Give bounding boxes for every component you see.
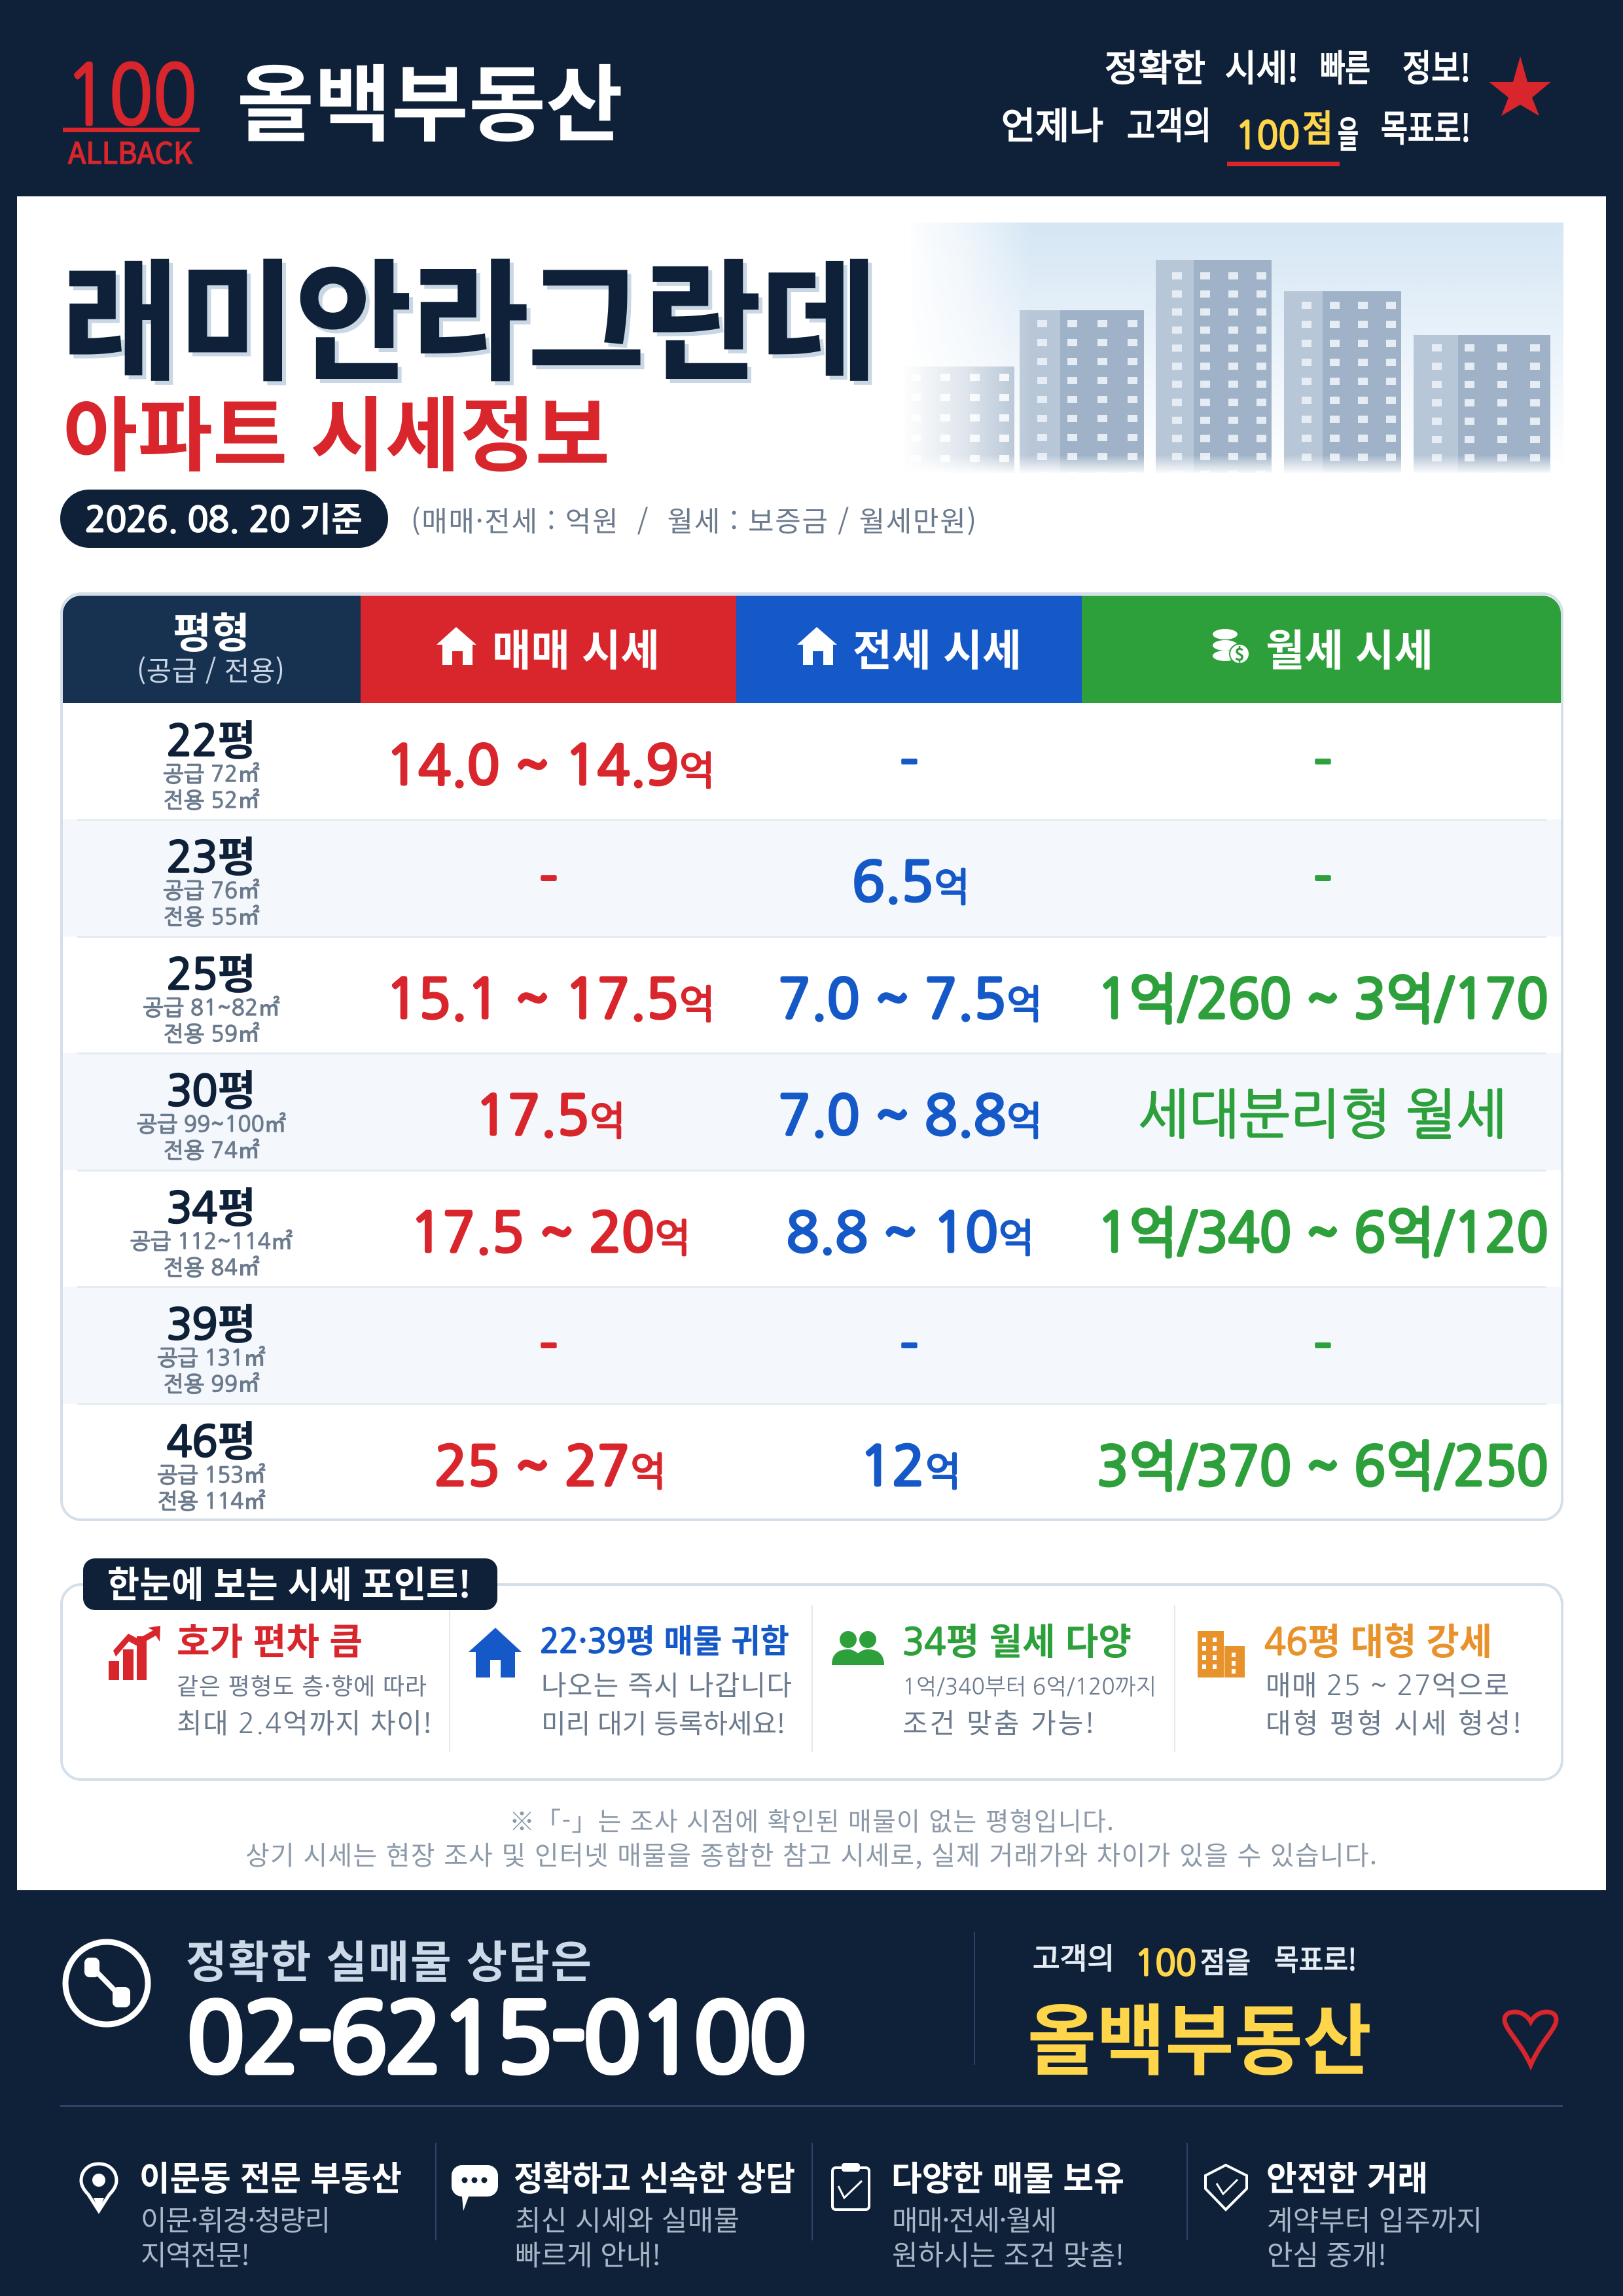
row: 34평: 1억/340 ~ 6억/120	[1097, 1206, 1548, 1259]
row: 22평: 14.0 ~ 14.9억	[386, 738, 715, 792]
footer slogan: 목표로!	[1274, 1936, 1357, 1979]
point: scarce listings: 22·39평 매물 귀함	[540, 1615, 789, 1662]
column header: area	[63, 596, 361, 703]
row: 30평: 30평	[167, 1058, 256, 1118]
row: 30평: 공급 99~100㎡	[137, 1113, 286, 1135]
point: scarce listings	[469, 1615, 792, 1741]
column header: monthly rent	[1082, 596, 1561, 703]
row: 23평: -	[1313, 853, 1332, 906]
point: asking price gap	[109, 1613, 432, 1742]
row: 30평: 7.0 ~ 8.8억	[778, 1088, 1043, 1142]
footer slogan: 점을	[1200, 1939, 1251, 1981]
header slogan: 시세!	[1225, 39, 1298, 92]
feature: many listings	[832, 2151, 1124, 2274]
point: large size strength: 대형 평형 시세 형성!	[1266, 1702, 1522, 1742]
row: 23평: -	[539, 853, 558, 906]
zebra rows	[63, 819, 1561, 1404]
footer brand: 올백부동산	[1027, 1979, 1372, 2090]
column header: jeonse: 전세 시세	[853, 616, 1022, 679]
row: 25평: 전용 59㎡	[164, 1022, 259, 1045]
row: 25평: 공급 81~82㎡	[143, 996, 280, 1018]
feature: local expert: 지역전문!	[141, 2233, 250, 2274]
feature: fast consult: 빠르게 안내!	[515, 2233, 661, 2274]
footnote: ※「-」는 조사 시점에 확인된 매물이 없는 평형입니다.	[509, 1802, 1114, 1839]
row: 34평: 전용 84㎡	[164, 1256, 259, 1278]
footer band	[0, 1890, 1623, 2296]
feature: fast consult: 정확하고 신속한 상담	[514, 2151, 795, 2200]
header slogan: 정보!	[1402, 39, 1471, 92]
icon: phone	[65, 1942, 148, 2024]
phone number: 02-6215-0100	[187, 1991, 806, 2085]
row: 25평: 7.0 ~ 7.5억	[778, 972, 1043, 1026]
header slogan	[1001, 39, 1471, 166]
row: 34평: 공급 112~114㎡	[130, 1230, 293, 1252]
icon: buildings	[1198, 1631, 1245, 1677]
point: monthly rent variety: 34평 월세 다양	[902, 1613, 1132, 1666]
row: 30평: 전용 74㎡	[164, 1139, 259, 1161]
header slogan: 을	[1338, 106, 1359, 159]
row: 23평: 전용 55㎡	[164, 905, 259, 927]
row: 22평: -	[1313, 736, 1332, 790]
brand name: 올백부동산	[237, 37, 623, 158]
column header: sale: 매매 시세	[492, 616, 660, 679]
row: 23평	[164, 824, 1332, 927]
icon: shield	[1205, 2165, 1247, 2210]
panel: price points	[62, 1556, 1562, 1780]
row: 22평: -	[899, 736, 919, 790]
header slogan: 고객의	[1127, 97, 1211, 150]
header slogan: 점	[1302, 99, 1333, 152]
main white panel	[17, 196, 1606, 1890]
row: 22평: 전용 52㎡	[164, 789, 259, 811]
row: 39평	[157, 1291, 1332, 1395]
icon: people	[832, 1631, 884, 1665]
title: 래미안라그란데	[62, 219, 878, 406]
feature: fast consult	[452, 2151, 795, 2274]
row: 22평: 22평	[167, 708, 256, 768]
row: 39평: 39평	[167, 1291, 256, 1352]
logo: 100 ALLBACK: 100	[65, 54, 197, 137]
row: 39평: 공급 131㎡	[157, 1346, 266, 1369]
date badge: 2026. 08. 20 기준	[85, 492, 363, 541]
header band	[0, 0, 1623, 196]
point: monthly rent variety: 1억/340부터 6억/120까지	[902, 1676, 1156, 1698]
row: 30평: 17.5억	[475, 1088, 626, 1142]
point: large size strength	[1198, 1613, 1522, 1742]
table frame	[62, 594, 1562, 1520]
row: 46평: 3억/370 ~ 6억/250	[1097, 1439, 1548, 1493]
header slogan: 언제나	[1001, 97, 1103, 150]
column header: area: (공급 / 전용)	[137, 649, 285, 689]
subtitle: 아파트 시세정보	[63, 370, 610, 488]
logo: 100 ALLBACK	[63, 54, 200, 172]
row: 23평: 23평	[167, 824, 256, 884]
footnote	[245, 1802, 1377, 1873]
row: 46평: 25 ~ 27억	[435, 1439, 666, 1493]
footnote: 상기 시세는 현장 조사 및 인터넷 매물을 종합한 참고 시세로, 실제 거래가와 차이가 있을 수 있습니다.	[245, 1835, 1377, 1873]
header slogan: 100	[1236, 117, 1300, 154]
feature: safe deal: 계약부터 입주까지	[1267, 2198, 1482, 2239]
row: 39평: -	[1313, 1320, 1332, 1374]
row: 25평: 25평	[167, 941, 256, 1001]
column header: area: 평형	[173, 600, 250, 660]
header slogan: 정확한	[1105, 39, 1205, 92]
feature: safe deal: 안심 중개!	[1267, 2233, 1387, 2274]
icon: pin	[81, 2164, 116, 2211]
feature: safe deal	[1205, 2151, 1482, 2274]
unit note: (매매·전세 : 억원 / 월세 : 보증금 / 월세만원)	[411, 499, 976, 540]
point: monthly rent variety	[832, 1613, 1156, 1742]
icon: house	[469, 1628, 522, 1677]
column header: monthly rent: 월세 시세	[1266, 616, 1433, 679]
row: 25평: 15.1 ~ 17.5억	[386, 972, 715, 1026]
column header: sale	[361, 596, 736, 703]
point: scarce listings: 미리 대기 등록하세요!	[541, 1702, 785, 1741]
feature: local expert	[81, 2151, 402, 2274]
logo: 100 ALLBACK: ALLBACK	[68, 130, 192, 172]
row: 39평: -	[539, 1320, 558, 1374]
feature: local expert: 이문·휘경·청량리	[141, 2198, 330, 2239]
row: 46평	[157, 1408, 1548, 1512]
feature: many listings: 다양한 매물 보유	[891, 2151, 1124, 2200]
footer slogan: 고객의	[1033, 1935, 1115, 1977]
row: 22평	[164, 708, 1332, 811]
feature: local expert: 이문동 전문 부동산	[139, 2151, 402, 2200]
point: monthly rent variety: 조건 맞춤 가능!	[902, 1702, 1094, 1742]
column header: jeonse	[736, 596, 1082, 703]
icon: heart	[1505, 2012, 1556, 2065]
column header: monthly rent: $	[1234, 641, 1245, 666]
row: 30평	[137, 1058, 1507, 1161]
row: 39평: -	[899, 1320, 919, 1374]
row: 34평: 17.5 ~ 20억	[410, 1206, 690, 1259]
row: 46평: 46평	[167, 1408, 256, 1469]
row: 30평: 세대분리형 월세	[1139, 1087, 1507, 1141]
row: 34평	[130, 1175, 1548, 1278]
row: 39평: 전용 99㎡	[164, 1372, 259, 1395]
feature: many listings: 매매·전세·월세	[892, 2198, 1057, 2239]
footer rule	[60, 2105, 1563, 2107]
header slogan: 빠른	[1320, 39, 1370, 92]
title: 래미안라그란데	[66, 223, 882, 410]
price table	[62, 594, 1562, 1520]
point: asking price gap: 최대 2.4억까지 차이!	[177, 1702, 432, 1742]
feature: safe deal: 안전한 거래	[1266, 2151, 1428, 2200]
row: 46평: 전용 114㎡	[157, 1490, 266, 1512]
feature: many listings: 원하시는 조건 맞춤!	[892, 2233, 1124, 2274]
point: asking price gap: 호가 편차 큼	[177, 1613, 363, 1666]
header slogan: 목표로!	[1381, 99, 1471, 152]
divider	[974, 1932, 975, 2065]
row: 34평: 8.8 ~ 10억	[787, 1206, 1034, 1259]
point: asking price gap: 같은 평형도 층·향에 따라	[177, 1668, 427, 1702]
row: 46평: 12억	[860, 1439, 961, 1493]
point: scarce listings: 나오는 즉시 나갑니다	[541, 1664, 792, 1704]
icon: star	[1489, 56, 1551, 116]
point: large size strength: 46평 대형 강세	[1264, 1613, 1492, 1666]
row: 46평: 공급 153㎡	[157, 1463, 266, 1486]
row: 25평: 1억/260 ~ 3억/170	[1097, 972, 1548, 1026]
icon: rising bars	[109, 1626, 160, 1680]
row: 25평	[143, 941, 1548, 1045]
feature: fast consult: 최신 시세와 실매물	[515, 2198, 740, 2239]
icon: clipboard	[832, 2163, 869, 2210]
panel heading: 한눈에 보는 시세 포인트!	[107, 1556, 471, 1609]
icon: speech bubble	[452, 2165, 498, 2211]
footer slogan	[1033, 1935, 1357, 1981]
consult label: 정확한 실매물 상담은	[186, 1926, 592, 1991]
row: 34평: 34평	[167, 1175, 256, 1235]
row: 23평: 공급 76㎡	[164, 879, 259, 901]
row: 22평: 공급 72㎡	[164, 762, 259, 785]
row: 23평: 6.5억	[852, 855, 970, 908]
illustration: skyline	[900, 219, 1567, 478]
footer slogan: 100	[1135, 1945, 1196, 1981]
point: large size strength: 매매 25 ~ 27억으로	[1266, 1664, 1509, 1704]
